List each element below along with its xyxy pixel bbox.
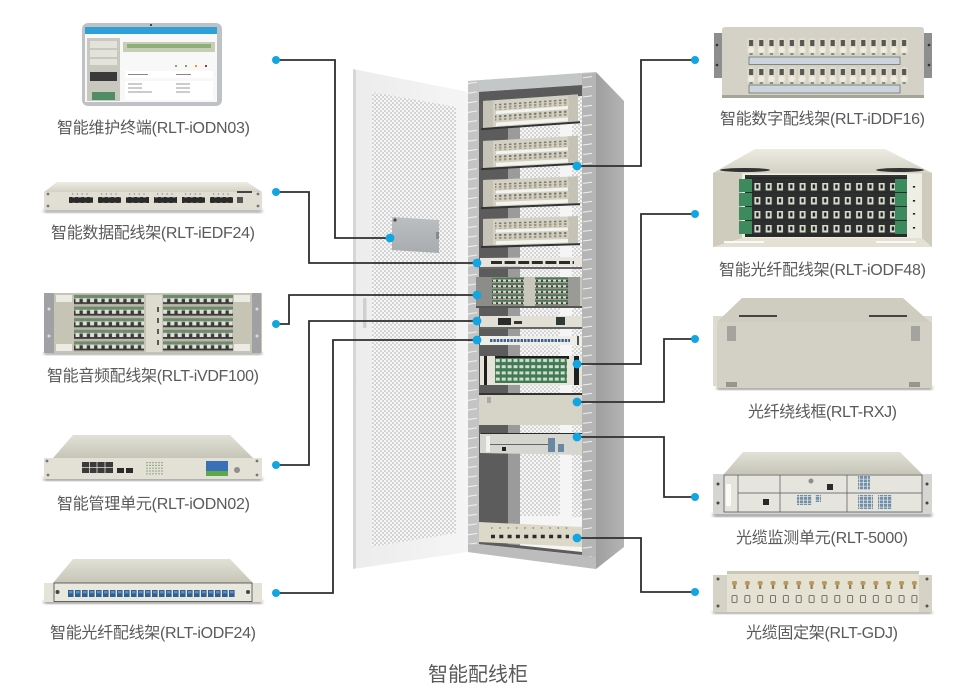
label: cable fixing frame: 光缆固定架(RLT-GDJ) [746, 624, 898, 642]
connector: winding frame [573, 335, 699, 406]
label: fiber patch panel 48: 智能光纤配线架(RLT-iODF48) [719, 261, 926, 279]
unit: cable fixing frame [479, 522, 582, 547]
device: smart audio patch panel [44, 293, 262, 355]
cabinet door [353, 69, 468, 569]
connector: fiber patch panel 48 [573, 210, 699, 368]
cabinet units [476, 94, 582, 547]
device: smart management unit [44, 435, 262, 481]
unit: audio patch panel [476, 277, 582, 308]
unit: management unit [480, 316, 582, 329]
label: audio patch panel: 智能音频配线架(RLT-iVDF100) [47, 367, 259, 385]
label: terminal: 智能维护终端(RLT-iODN03) [57, 119, 250, 137]
title: 智能配线柜 [428, 663, 528, 686]
device: smart data patch panel [44, 182, 262, 213]
unit: cable monitoring unit [480, 433, 582, 455]
label: management unit: 智能管理单元(RLT-iODN02) [57, 495, 250, 513]
cabinet body [468, 72, 624, 569]
unit: digital patch panels [481, 94, 580, 248]
connector: cable fixing frame [573, 534, 699, 596]
connector: terminal [272, 56, 394, 242]
unit: data patch panel [480, 257, 582, 269]
device: smart maintenance terminal tablet [82, 23, 222, 106]
device: cable fixing frame [713, 571, 932, 614]
device: fiber winding frame [713, 298, 932, 390]
label: data patch panel: 智能数据配线架(RLT-iEDF24) [51, 224, 255, 242]
unit: fiber patch panel 48 [480, 356, 582, 385]
device: cable monitoring unit [713, 452, 932, 517]
label: cable monitoring unit: 光缆监测单元(RLT-5000) [736, 529, 908, 547]
label: winding frame: 光纤绕线框(RLT-RXJ) [748, 403, 897, 421]
connector: digital patch panel [573, 56, 699, 170]
device: smart digital patch panel [714, 27, 932, 98]
connector: fiber patch panel 24 [272, 336, 481, 597]
connector: cable monitoring unit [573, 433, 699, 501]
label: fiber patch panel 24: 智能光纤配线架(RLT-iODF24) [50, 624, 256, 642]
unit: fiber winding frame [479, 393, 582, 425]
connector: management unit [272, 317, 481, 469]
connector: data patch panel [272, 188, 481, 267]
device: smart fiber patch panel 48 [713, 149, 932, 247]
unit: fiber patch panel 24 [480, 336, 582, 345]
label: digital patch panel: 智能数字配线架(RLT-iDDF16) [720, 110, 925, 128]
device: smart fiber patch panel 24 [44, 559, 262, 604]
connector: audio patch panel [272, 291, 481, 328]
